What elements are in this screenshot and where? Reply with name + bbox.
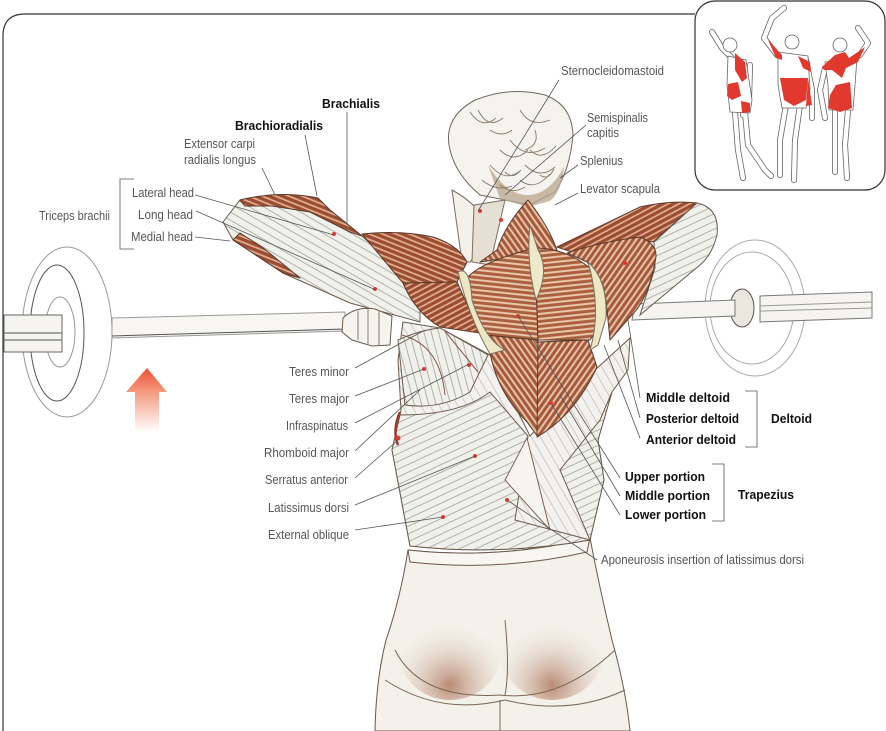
barbell <box>4 240 872 417</box>
label: brachialis: Brachialis <box>322 96 380 111</box>
left forearm <box>223 197 420 322</box>
label: teres major: Teres major <box>289 391 350 406</box>
label: extensor: Extensor carpi <box>184 136 255 151</box>
left triceps upper arm <box>362 233 467 283</box>
label: serratus anterior: Serratus anterior <box>265 472 349 487</box>
label: external oblique: External oblique <box>268 527 349 542</box>
brachioradialis <box>240 194 362 236</box>
inset figure: back view <box>820 28 868 178</box>
label: long head: Long head <box>138 207 193 222</box>
lower trapezius right <box>537 340 597 437</box>
label: semispinalis: Semispinalis <box>587 110 648 125</box>
trapezius <box>458 200 607 437</box>
label: deltoid bracket <box>745 391 757 447</box>
middle trapezius left <box>467 248 538 340</box>
hand gripping bar <box>342 308 392 346</box>
inset figure: side view <box>712 32 771 178</box>
left bar end <box>4 315 62 352</box>
label: triceps brachii: Triceps brachii <box>39 208 110 223</box>
label: rhomboid major: Rhomboid major <box>264 445 350 460</box>
label: aponeurosis: Aponeurosis insertion of latissimus dorsi <box>601 552 804 567</box>
upward arrow <box>126 368 167 432</box>
label: trapezius: Trapezius <box>738 487 794 502</box>
labels <box>39 63 812 567</box>
right forearm <box>640 203 717 315</box>
right deltoid <box>567 237 656 340</box>
scapular spine left <box>458 271 505 354</box>
label: teres minor: Teres minor <box>289 364 350 379</box>
page frame <box>3 14 695 731</box>
label: deltoid: Deltoid <box>771 411 812 426</box>
label: radialis longus: radialis longus <box>184 152 256 167</box>
label: middle deltoid: Middle deltoid <box>646 390 730 405</box>
lower trapezius left <box>484 335 538 437</box>
inset panel: full-body muscle views <box>695 1 885 190</box>
muscle marker dots <box>332 209 627 519</box>
label: lower portion: Lower portion <box>625 507 706 522</box>
label: middle portion: Middle portion <box>625 488 710 503</box>
label: splenius: Splenius <box>580 153 623 168</box>
head and hair <box>448 91 573 207</box>
label: posterior deltoid: Posterior deltoid <box>646 411 739 426</box>
left weight plate <box>22 247 112 417</box>
label: brachioradialis: Brachioradialis <box>235 118 323 133</box>
right weight plate <box>705 240 805 376</box>
shorts <box>375 538 630 731</box>
scapular spine right <box>588 262 606 350</box>
label: triceps bracket <box>120 179 134 249</box>
label: neck: Sternocleidomastoid <box>561 63 664 78</box>
long head shading <box>233 233 300 278</box>
label: medial head: Medial head <box>131 229 193 244</box>
inset figure: front view <box>764 8 812 180</box>
label: infraspinatus: Infraspinatus <box>286 418 348 433</box>
neck and sternocleidomastoid <box>452 190 505 265</box>
label: anterior deltoid: Anterior deltoid <box>646 432 736 447</box>
tendon centre <box>529 225 544 300</box>
upper trapezius neck <box>480 200 557 262</box>
leader lines <box>195 80 640 560</box>
bar shaft left <box>112 312 345 338</box>
label: levator: Levator scapula <box>580 181 661 196</box>
label: latissimus dorsi: Latissimus dorsi <box>268 500 349 515</box>
right arm upper <box>557 202 697 258</box>
right bar end <box>760 292 872 322</box>
torso, latissimus dorsi <box>392 322 630 550</box>
label: upper portion: Upper portion <box>625 469 705 484</box>
label: trapezius bracket <box>712 464 724 521</box>
left deltoid <box>403 282 480 333</box>
figure: back view <box>223 91 717 731</box>
label: lateral head: Lateral head <box>132 185 194 200</box>
label: capitis: capitis <box>587 125 619 140</box>
bar shaft right <box>632 300 735 320</box>
middle trapezius right <box>535 248 607 340</box>
